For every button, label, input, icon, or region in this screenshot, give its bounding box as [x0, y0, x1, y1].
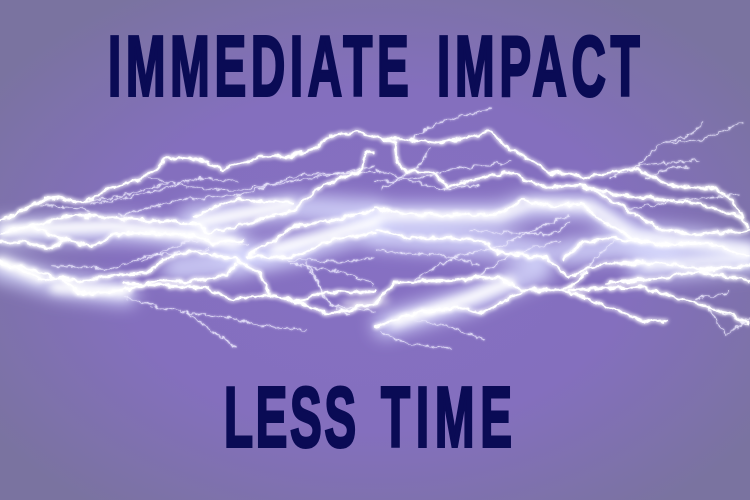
- subtitle: less time: LESS: [224, 370, 356, 465]
- subtitle: less time: [224, 370, 512, 465]
- lightning glow: soft outer bands: [0, 206, 750, 325]
- title: immediate impact: IMMEDIATE: [108, 19, 409, 114]
- lightning bolts: main strokes: [0, 132, 750, 327]
- subtitle: less time: TIME: [381, 370, 512, 465]
- lightning glow: bright cores: [0, 204, 750, 322]
- lightning bolts: faint branches: [40, 108, 750, 348]
- title: immediate impact: [108, 19, 640, 114]
- title: immediate impact: IMPACT: [437, 19, 640, 114]
